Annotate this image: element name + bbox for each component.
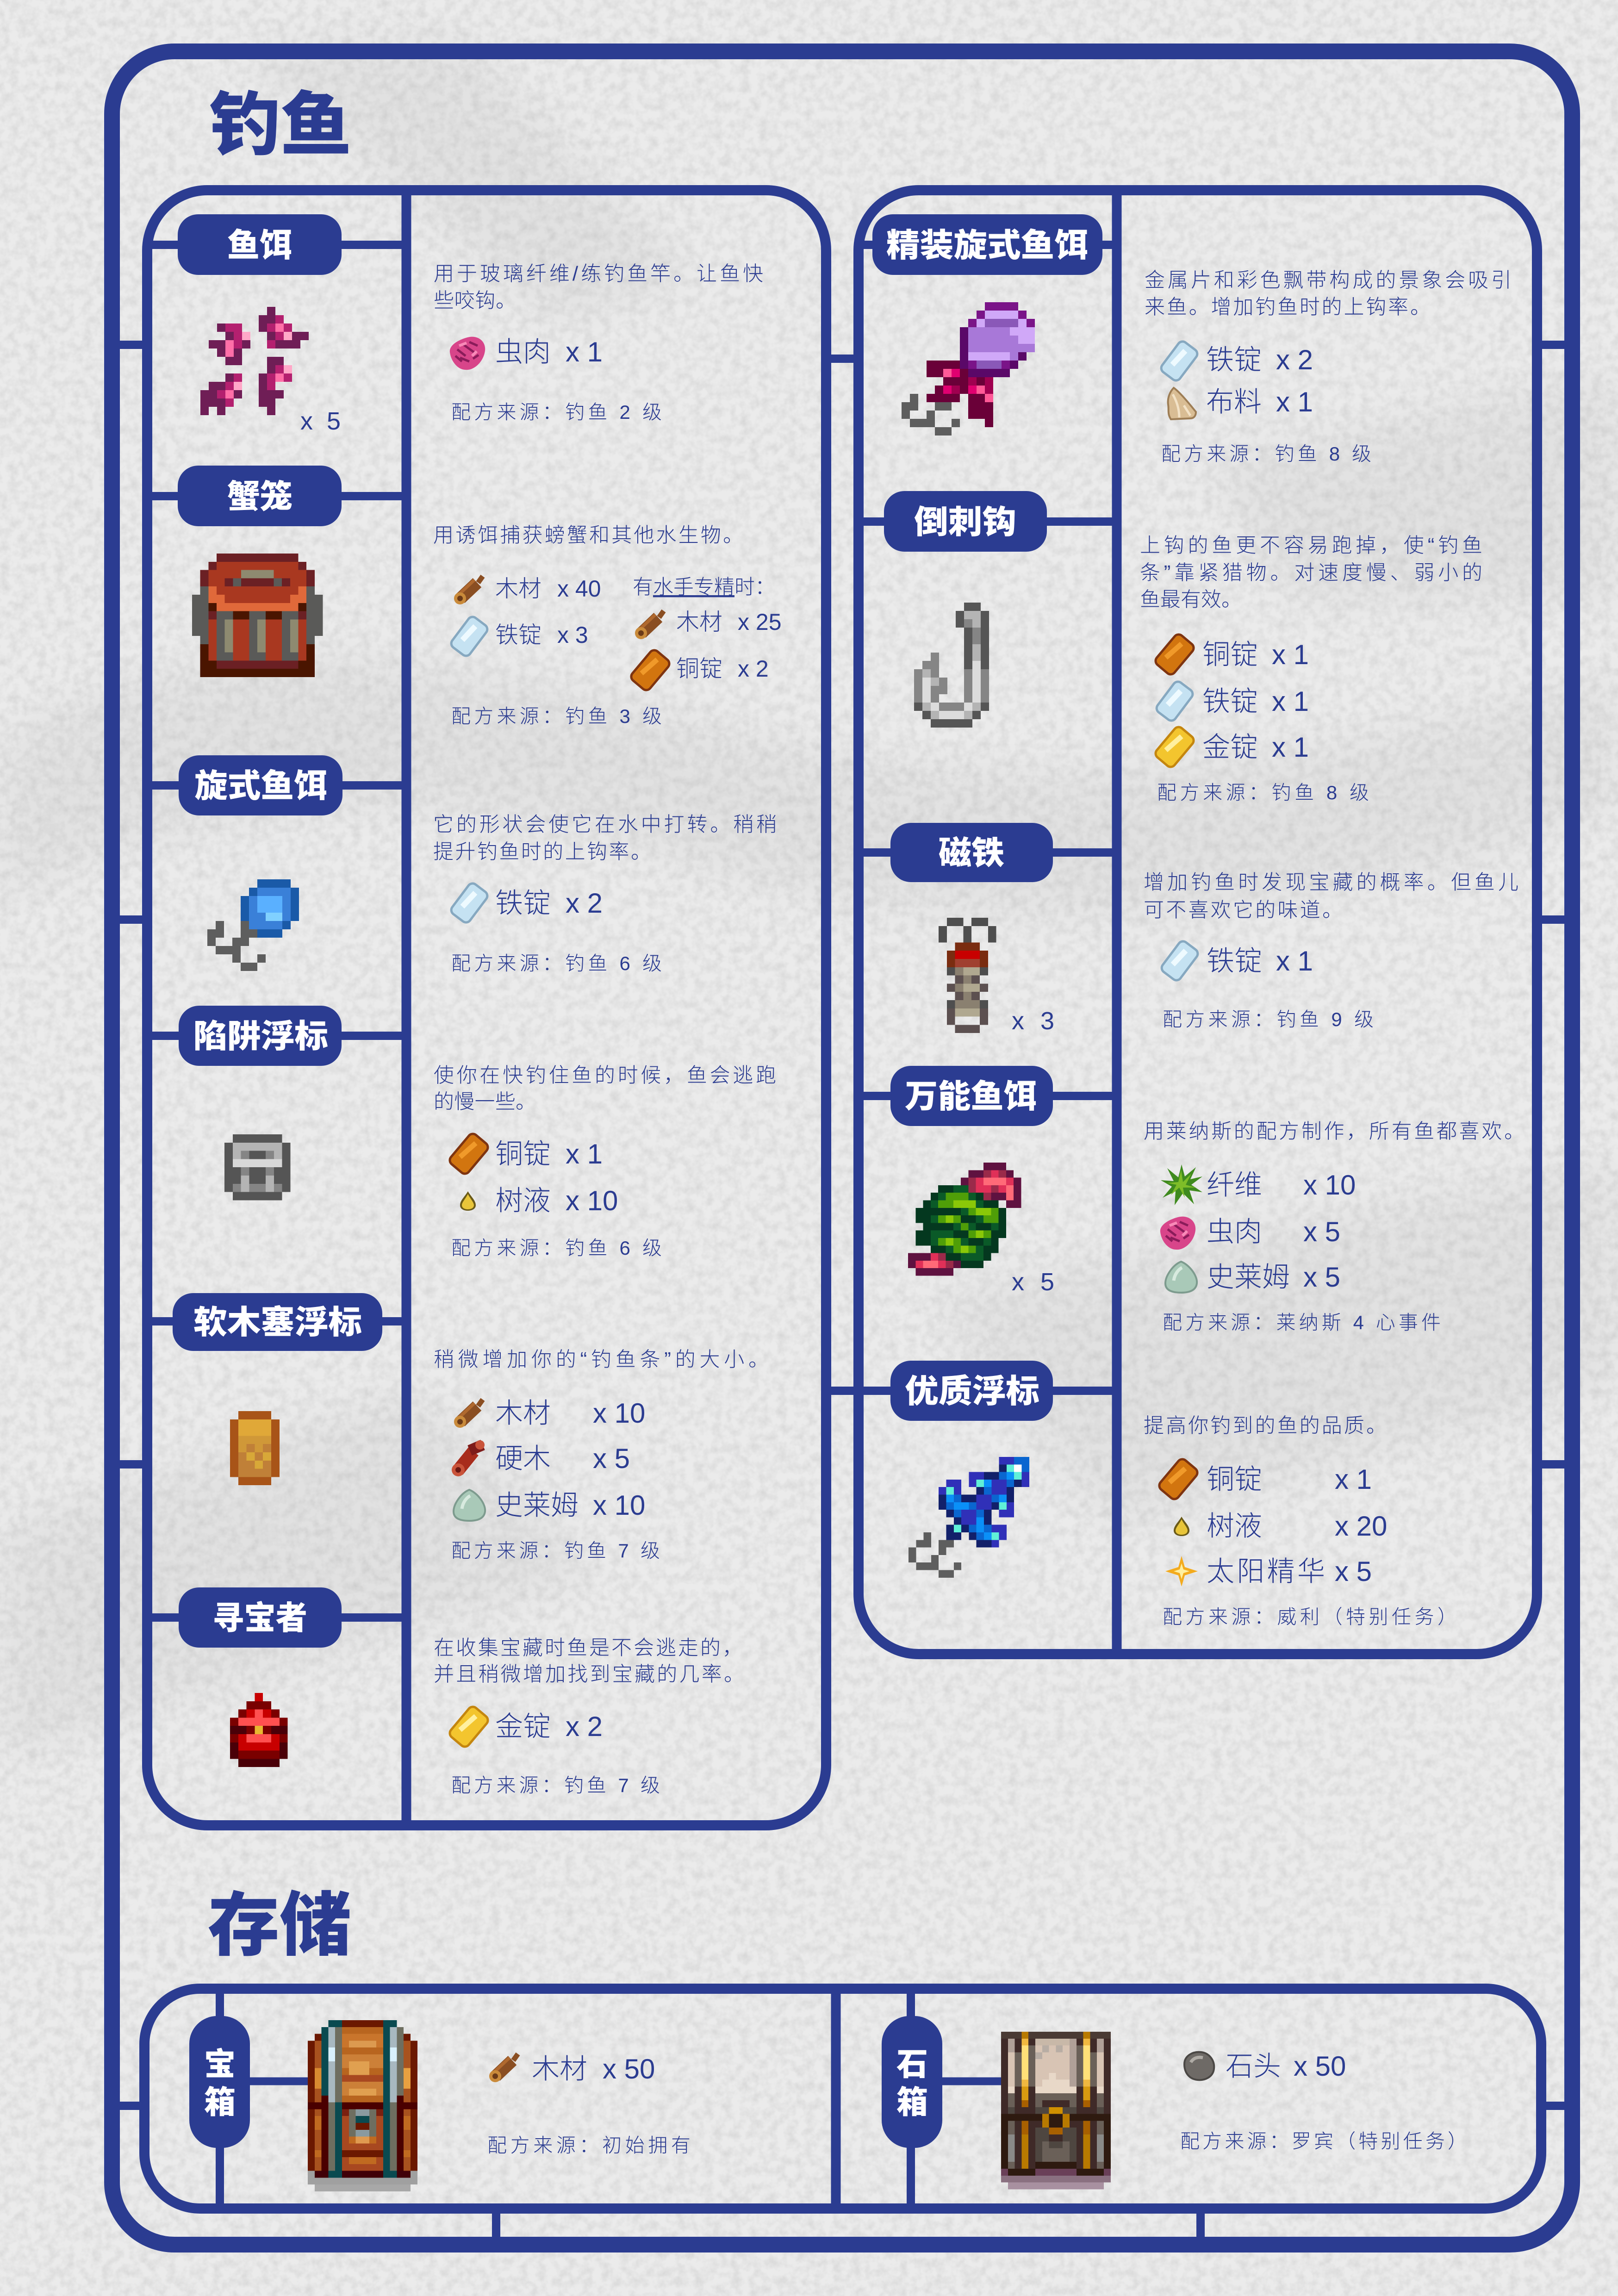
ingredients: base: x 3 [557, 622, 588, 648]
ingredients: x 1 [1276, 386, 1313, 417]
description: 稍微增加你的“钓鱼条”的大小。 [434, 1348, 769, 1371]
recipe source: 配方来源：初始拥有 [487, 2134, 691, 2156]
description: 的慢一些。 [434, 1090, 536, 1113]
icon: dressed spinner [902, 306, 1035, 431]
ingredients: x 5 [1303, 1262, 1340, 1293]
recipe source: 配方来源：钓鱼 9 级 [1163, 1008, 1374, 1030]
ingredient: 虫肉: 虫肉 [495, 336, 551, 367]
label pill: 鱼饵 [178, 214, 342, 275]
description [433, 813, 777, 863]
label pill: 万能鱼饵: 万能鱼饵 [905, 1078, 1037, 1114]
label pill: 鱼饵: 鱼饵 [227, 227, 292, 263]
ingredients: x 10 [593, 1398, 645, 1429]
ingredients: x 1 [1272, 639, 1309, 670]
label pill: 宝箱: 宝 [204, 2047, 236, 2082]
ingredients: 铁锭 [1202, 686, 1258, 717]
label pill: 石箱: 箱 [896, 2085, 928, 2120]
panel: storage [144, 1989, 1541, 2209]
ingredient: 虫肉 [450, 336, 603, 370]
label pill: 寻宝者: 寻宝者 [212, 1600, 307, 1636]
icon: trap bobber [224, 1139, 290, 1196]
label pill: 石箱: 石 [896, 2047, 928, 2082]
ingredients: x 1 [566, 1139, 603, 1170]
ingredients: with mariner profession: 有水手专精时： [633, 576, 775, 598]
recipe source: 配方来源：钓鱼 6 级 [451, 1237, 662, 1259]
ingredient: 铁锭 [1160, 940, 1313, 982]
label pill: 旋式鱼饵 [179, 755, 342, 815]
ingredient: 金锭: 金锭 [495, 1711, 551, 1742]
label pill: 陷阱浮标 [179, 1006, 342, 1066]
ingredients: 太阳精华 [1207, 1556, 1325, 1587]
frame connectors [116, 345, 1569, 2240]
ingredients: x 20 [1335, 1511, 1387, 1542]
label pill: 倒刺钩 [884, 491, 1047, 552]
ingredient: 石头: x 50 [1294, 2051, 1346, 2082]
ingredients: x 5 [1335, 1556, 1372, 1587]
ingredient: 虫肉: x 1 [566, 336, 603, 367]
ingredient: 铁锭: x 1 [1276, 946, 1313, 977]
ingredients: 史莱姆 [1207, 1262, 1290, 1293]
recipe: 鱼饵 [178, 214, 763, 435]
ingredient: 铁锭: 铁锭 [1207, 946, 1262, 977]
ingredients: with mariner profession [629, 576, 782, 692]
ingredient: 石头 [1184, 2051, 1346, 2082]
ingredients: x 1 [1272, 686, 1309, 717]
label pill: 精装旋式鱼饵: 精装旋式鱼饵 [886, 227, 1088, 263]
icon: wild bait [908, 1166, 1021, 1272]
ingredients: x 2 [1276, 344, 1313, 375]
recipe: 万能鱼饵 [890, 1066, 1525, 1333]
ingredients: 木材 [495, 1398, 551, 1429]
icon: bait [200, 311, 309, 411]
ingredients: 铜锭 [495, 1139, 551, 1170]
description: 可不喜欢它的味道。 [1144, 899, 1343, 921]
recipe: 陷阱浮标 [179, 1006, 776, 1259]
recipe source: 配方来源：钓鱼 8 级 [1161, 443, 1371, 465]
ingredient: 金锭 [448, 1705, 603, 1748]
recipe: 优质浮标 [890, 1361, 1457, 1628]
ingredients: base: 铁锭 [495, 622, 541, 648]
description: 金属片和彩色飘带构成的景象会吸引 [1145, 269, 1512, 292]
description: 提升钓鱼时的上钩率。 [433, 840, 651, 863]
description [434, 262, 763, 312]
ingredient: 金锭: x 2 [566, 1711, 603, 1742]
description: 它的形状会使它在水中打转。稍稍 [433, 813, 777, 836]
recipe: 寻宝者 [179, 1587, 744, 1796]
label pill: 陷阱浮标: 陷阱浮标 [193, 1018, 328, 1054]
description [1144, 871, 1518, 921]
description: 用于玻璃纤维/练钓鱼竿。让鱼快 [434, 262, 763, 285]
ingredient: 石头: 石头 [1226, 2051, 1281, 2082]
description: 在收集宝藏时鱼是不会逃走的， [434, 1636, 743, 1659]
ingredients: base: 木材 [495, 576, 541, 602]
ingredients [1157, 1457, 1387, 1587]
label pill: 优质浮标: 优质浮标 [905, 1373, 1039, 1409]
description: 使你在快钓住鱼的时候，鱼会逃跑 [434, 1064, 776, 1087]
ingredient: 木材: 木材 [532, 2053, 587, 2084]
label pill: 优质浮标 [890, 1361, 1053, 1421]
ingredients: with mariner profession: 铜锭 [676, 656, 722, 682]
ingredients: x 10 [593, 1490, 645, 1521]
label pill: 蟹笼: 蟹笼 [227, 479, 292, 515]
connector [250, 2077, 308, 2085]
quantity: x 5 [1012, 1268, 1054, 1296]
quantity: x 3 [1012, 1007, 1054, 1035]
description: 来鱼。增加钓鱼时的上钩率。 [1145, 296, 1431, 318]
recipe: 软木塞浮标 [173, 1293, 769, 1562]
recipe source: 配方来源：罗宾（特别任务） [1180, 2130, 1467, 2152]
label pill: 磁铁 [890, 823, 1053, 882]
recipe: 磁铁 [890, 823, 1518, 1035]
ingredients [1153, 633, 1309, 769]
description [1145, 269, 1512, 318]
ingredients: x 10 [566, 1185, 618, 1216]
icon: spinner [207, 884, 299, 967]
ingredients: with mariner profession: x 25 [738, 609, 782, 635]
ingredients: x 10 [1303, 1170, 1356, 1201]
ingredients: base [449, 576, 601, 658]
icon: wooden chest [308, 2020, 417, 2191]
quantity: x 5 [300, 407, 341, 435]
recipe source: 配方来源：钓鱼 3 级 [451, 705, 662, 727]
ingredients: x 1 [1272, 732, 1309, 763]
recipe source: 配方来源：钓鱼 2 级 [451, 401, 662, 423]
recipe source: 配方来源：钓鱼 7 级 [451, 1540, 660, 1562]
ingredients: x 5 [593, 1443, 630, 1474]
description: 并且稍微增加找到宝藏的几率。 [434, 1663, 744, 1686]
recipe: 石箱 [882, 2016, 1467, 2189]
label pill: 软木塞浮标: 软木塞浮标 [193, 1304, 362, 1340]
label pill: 精装旋式鱼饵 [872, 214, 1102, 275]
recipe source: 配方来源：钓鱼 6 级 [451, 952, 662, 974]
ingredient: 木材: x 50 [603, 2053, 655, 2084]
ingredient: 木材 [489, 2053, 655, 2084]
label pill: 倒刺钩: 倒刺钩 [914, 504, 1016, 540]
ingredients [1160, 1164, 1356, 1293]
ingredients: 虫肉 [1207, 1216, 1262, 1247]
recipe source: 配方来源：钓鱼 7 级 [451, 1774, 660, 1796]
ingredients: 纤维 [1207, 1170, 1262, 1201]
ingredients: 树液 [1207, 1511, 1262, 1542]
ingredients: 铜锭 [1207, 1464, 1262, 1495]
ingredients: x 5 [1303, 1216, 1340, 1247]
description: 上钩的鱼更不容易跑掉，使“钓鱼 [1140, 534, 1482, 557]
recipe source: 配方来源：莱纳斯 4 心事件 [1163, 1312, 1441, 1333]
description: 提高你钓到的鱼的品质。 [1144, 1414, 1387, 1437]
heading: 钓鱼: 钓鱼 [209, 86, 352, 164]
ingredients [452, 1398, 645, 1521]
heading: 存储: 存储 [208, 1886, 351, 1964]
description: 条”靠紧猎物。对速度慢、弱小的 [1140, 561, 1482, 584]
ingredients: 硬木 [495, 1443, 551, 1474]
icon: quality bobber [909, 1461, 1029, 1574]
label pill: 软木塞浮标 [173, 1293, 382, 1351]
description: 些咬钩。 [434, 289, 516, 312]
ingredients: 树液 [495, 1185, 551, 1216]
icon: barbed hook [914, 607, 989, 723]
label pill: 石箱 [882, 2016, 942, 2148]
icon: magnet [939, 922, 996, 1029]
recipe: 蟹笼 [178, 466, 782, 727]
description: 增加钓鱼时发现宝藏的概率。但鱼儿 [1144, 871, 1518, 894]
ingredient: 铁锭 [449, 882, 603, 924]
ingredients: with mariner profession: 木材 [676, 609, 722, 635]
icon: cork bobber [230, 1415, 280, 1481]
ingredients: with mariner profession: x 2 [738, 656, 769, 682]
connector [942, 2077, 1001, 2085]
ingredients: x 1 [1335, 1464, 1372, 1495]
description: 用诱饵捕获螃蟹和其他水生物。 [433, 524, 743, 547]
icon: treasure hunter [230, 1697, 288, 1763]
ingredients: 铜锭 [1202, 639, 1258, 670]
ingredient: 铁锭: x 2 [566, 888, 603, 919]
label pill: 磁铁: 磁铁 [939, 835, 1004, 871]
ingredient: 铁锭: 铁锭 [495, 888, 551, 919]
description: 鱼最有效。 [1140, 588, 1242, 611]
recipe: 旋式鱼饵 [179, 755, 777, 974]
label pill: 寻宝者 [179, 1587, 342, 1648]
description [434, 1636, 744, 1686]
ingredients [448, 1132, 618, 1216]
ingredients [1159, 340, 1313, 419]
label pill: 蟹笼 [178, 466, 342, 526]
icon: stone chest [1001, 2032, 1111, 2189]
description [434, 1064, 776, 1113]
recipe: 精装旋式鱼饵 [872, 214, 1512, 465]
recipe source: 配方来源：钓鱼 8 级 [1157, 782, 1369, 803]
label pill: 宝箱: 箱 [204, 2085, 236, 2120]
description [1140, 534, 1482, 611]
icon: crab pot [192, 558, 323, 673]
label pill: 万能鱼饵 [890, 1066, 1053, 1126]
recipe source: 配方来源：威利（特别任务） [1163, 1606, 1457, 1628]
ingredients: 史莱姆 [495, 1490, 579, 1521]
ingredients: 铁锭 [1206, 344, 1262, 375]
description: 用莱纳斯的配方制作，所有鱼都喜欢。 [1144, 1120, 1525, 1143]
ingredients: 金锭 [1202, 732, 1258, 763]
recipe: 倒刺钩 [884, 491, 1482, 803]
recipe: 宝箱 [189, 2016, 691, 2191]
ingredients: 布料 [1206, 386, 1262, 417]
panel: right fishing recipes [859, 190, 1537, 1654]
ingredients: base: x 40 [557, 576, 601, 602]
panel: left fishing recipes [147, 190, 826, 1825]
label pill: 旋式鱼饵: 旋式鱼饵 [194, 768, 327, 804]
label pill: 宝箱 [189, 2016, 250, 2148]
